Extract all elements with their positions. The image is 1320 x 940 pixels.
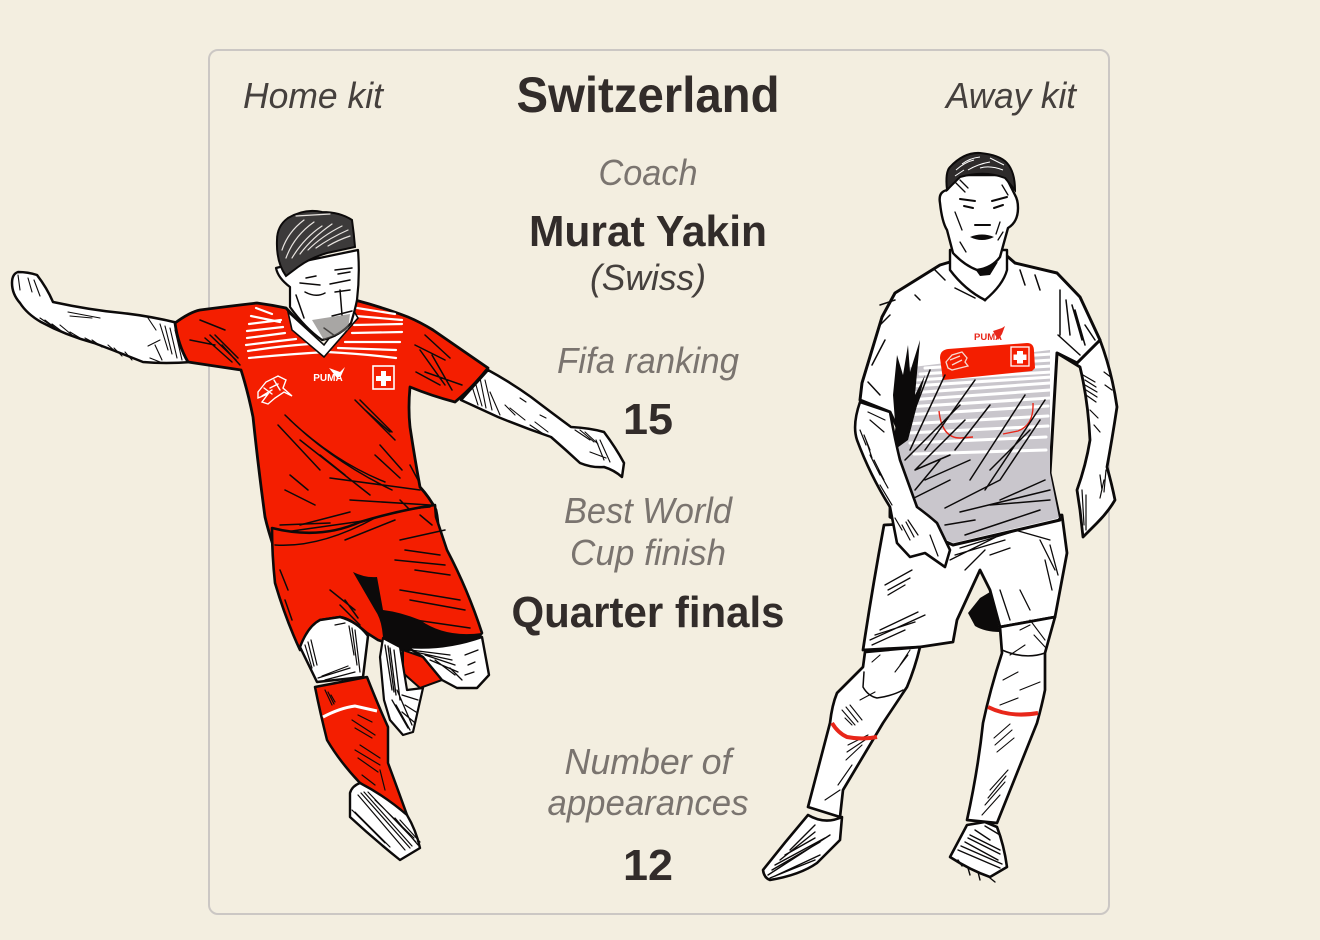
shorts [863,515,1067,650]
badge: lion [258,376,292,404]
head [276,211,359,340]
text block: best World Cup finish: Cup finish [570,532,726,573]
heading: Home kit: Home kit [243,75,385,116]
shirt [860,256,1100,545]
shirt white stripes [905,354,1052,454]
logo: puma [974,326,1005,343]
title: Switzerland: Switzerland [516,67,780,123]
text block: number of appearances: 12 [623,841,673,890]
text block: Fifa ranking: 15 [623,395,673,444]
right arm [461,370,624,477]
shirt left shadow [893,340,925,448]
band lion [946,352,968,370]
shirt folds [190,320,462,532]
badge: Swiss cross [373,366,394,389]
shorts dark inner [968,592,1000,632]
red side marks [939,403,1033,438]
sock stripe [323,706,377,717]
neck [950,250,1007,300]
text block: coach [529,152,767,298]
right sock stripe [988,707,1038,715]
arm shading [18,275,610,462]
text block: coach: Murat Yakin [529,207,767,256]
right arm [1057,340,1117,537]
logo: puma [313,367,345,384]
left leg [808,647,920,817]
left arm [12,272,192,363]
illustration: away kit player [763,153,1117,882]
text block: best World Cup finish: Quarter finals [512,588,784,637]
shirt [175,300,488,548]
shirt grey fade [897,350,1059,543]
collar [288,308,358,357]
text block: number of appearances [548,741,748,890]
boot [350,783,420,860]
text block: number of appearances: Number of [564,741,735,782]
raised foot boot [380,638,423,735]
hair [277,211,355,276]
right leg [967,617,1055,823]
text block: coach: (Swiss) [590,257,706,298]
facial features [296,268,352,336]
chest stripes [246,308,402,358]
text block: best World Cup finish: Best World [564,490,733,531]
band cross [1011,347,1029,366]
raised leg sock [403,650,442,688]
panel: team card border [209,50,1109,914]
text block: best World Cup finish [512,490,784,637]
shorts folds [275,507,470,628]
illustration: home kit player [12,211,624,860]
heading: Away kit: Away kit [944,75,1078,116]
neck and face [276,250,359,340]
standing thigh [300,617,368,682]
beard shading [312,314,350,340]
left boot [763,815,842,880]
hair [946,153,1015,190]
logo: puma: PUMA [974,332,1002,343]
shorts fold shadow [353,572,482,651]
eyes, nose, mouth [960,197,1007,225]
head [940,153,1018,270]
shirt folds [868,270,1095,535]
left sock stripe [832,723,877,738]
text block: Fifa ranking: Fifa ranking [557,340,739,381]
shorts [272,505,482,650]
logo: puma: PUMA [313,373,343,384]
red chest band [940,343,1035,380]
text block: Fifa ranking [557,340,739,444]
raised leg thigh [407,637,489,688]
left arm and hand over shirt [855,402,950,567]
sock [315,677,407,815]
right boot [950,822,1007,882]
text block: number of appearances: appearances [548,782,748,823]
text block: coach: Coach [598,152,698,193]
